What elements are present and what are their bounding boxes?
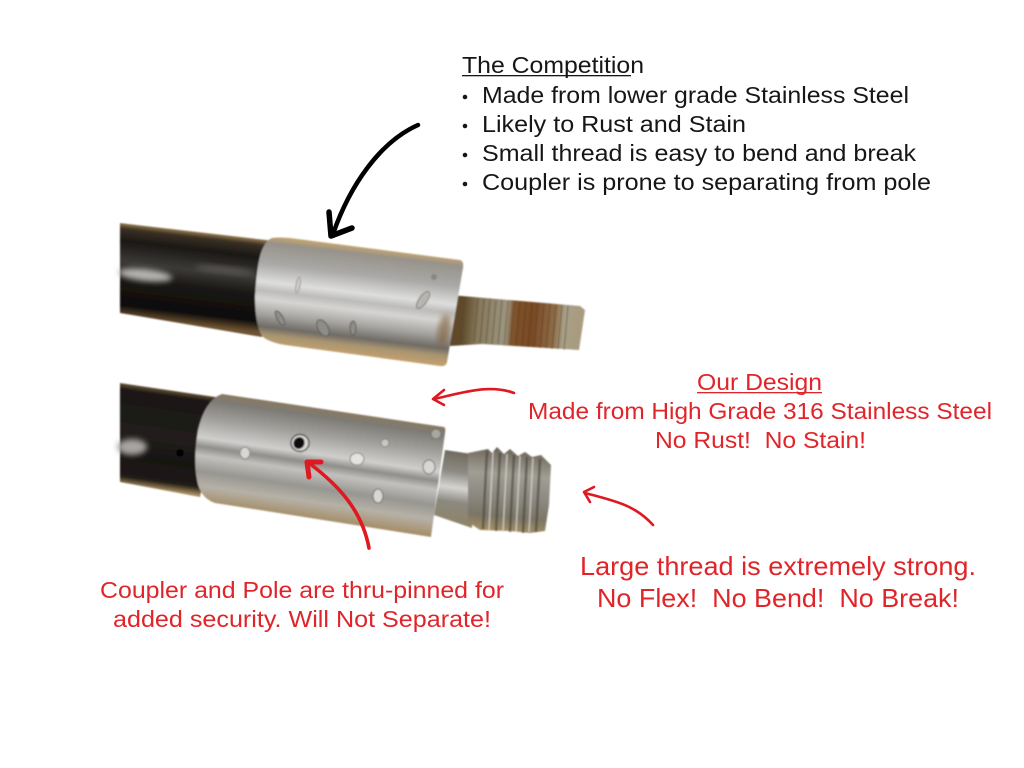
heading and list: the competition [462, 52, 931, 195]
arrow: red to thru-pin [307, 462, 369, 548]
text: thru-pinned note: Coupler and Pole are thru-pinned for [100, 577, 504, 603]
heading and list: the competition: Small thread is easy to bend and break [482, 140, 917, 166]
text: large thread note: No Flex! No Bend! No Break! [597, 583, 959, 613]
arrow: red to our coupler [433, 389, 514, 405]
heading and list: the competition: Made from lower grade Stainless Steel [482, 82, 909, 108]
steel coupler [195, 394, 445, 537]
text: our design: No Rust! No Stain! [655, 427, 866, 453]
large thread [468, 447, 551, 533]
small thread with rust [450, 295, 585, 350]
photo: our design coupler [117, 383, 551, 537]
text: our design [528, 369, 992, 453]
black pole [120, 223, 275, 337]
text: large thread note: Large thread is extremely strong. [580, 551, 976, 581]
text: large thread note [580, 551, 976, 613]
black pole [120, 383, 222, 497]
arrow: black to competition coupler [329, 125, 418, 236]
heading and list: the competition: Likely to Rust and Stain [482, 111, 746, 137]
steel coupler [255, 238, 463, 366]
heading and list: the competition: Coupler is prone to separating from pole [482, 169, 931, 195]
arrow: red to large thread [584, 487, 653, 525]
neck [434, 450, 472, 528]
text: thru-pinned note: added security. Will Not Separate! [113, 606, 491, 632]
photo: competition coupler [118, 223, 585, 366]
heading and list: the competition: The Competition [462, 52, 644, 78]
text: our design: Our Design [697, 369, 822, 395]
text: thru-pinned note [100, 577, 504, 632]
thru-pin hole [291, 434, 309, 452]
text: our design: Made from High Grade 316 Stainless Steel [528, 398, 992, 424]
